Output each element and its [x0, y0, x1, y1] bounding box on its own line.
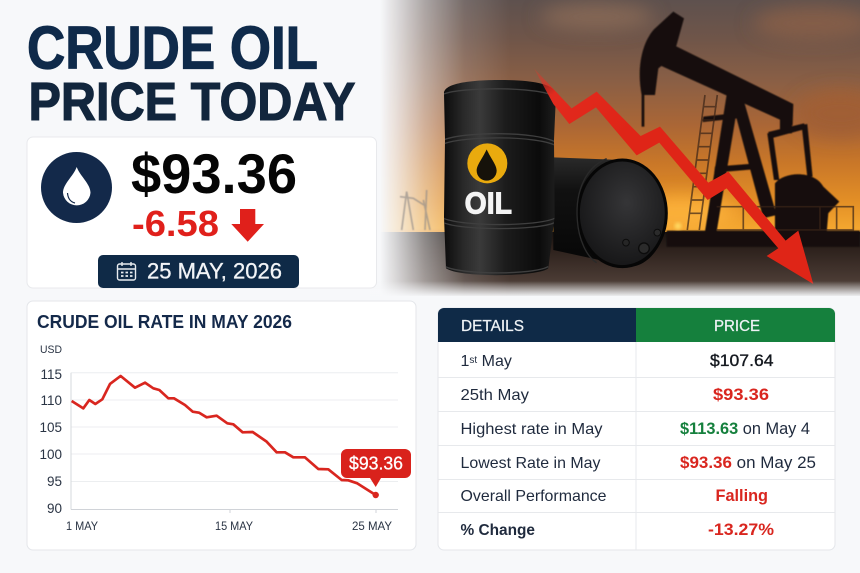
price callout: [341, 449, 411, 487]
x axis labels: 1 MAY: [66, 519, 98, 533]
oil logo drop: [477, 149, 497, 181]
row labels: May: [477, 353, 512, 370]
row labels: Lowest Rate in May: [460, 455, 600, 472]
distant pump jacks: [400, 190, 430, 230]
pump jack silhouette: [640, 12, 860, 247]
y axis labels: 90: [47, 501, 62, 516]
end point: [372, 492, 379, 498]
lying barrel bungs: [639, 243, 649, 254]
row labels: [460, 353, 607, 539]
row values: $107.64: [710, 352, 774, 370]
row labels: % Change: [460, 522, 535, 539]
table card: [438, 308, 835, 550]
row values: $93.36: [713, 386, 769, 404]
oil logo circle: [467, 143, 507, 183]
falling red arrow: [534, 68, 813, 284]
row values: $93.36 on May 25: [680, 454, 816, 472]
ladder and fence: [687, 95, 853, 230]
lying barrel end cap: [578, 160, 666, 267]
y axis unit: USD: [40, 344, 62, 356]
icon: down arrow: [231, 209, 264, 242]
lying barrel: [553, 157, 667, 267]
y axis labels: 115: [40, 367, 62, 382]
x axis labels: 25 MAY: [352, 519, 392, 533]
row values: Falling: [716, 487, 768, 505]
title: [27, 14, 356, 132]
price value: $93.36: [131, 142, 297, 205]
y axis labels: 110: [40, 393, 62, 408]
icon: calendar: [118, 262, 136, 280]
lying barrel hoop: [577, 159, 607, 263]
standing barrel body: [444, 80, 556, 275]
row labels: st: [469, 355, 477, 366]
sky clouds: [540, 3, 860, 230]
x axis labels: 15 MAY: [215, 519, 253, 533]
row labels: 25th May: [460, 387, 529, 404]
price callout: $93.36: [349, 454, 403, 474]
chart heading: CRUDE OIL RATE IN MAY 2026: [37, 312, 292, 332]
date text: 25 MAY, 2026: [147, 258, 282, 284]
price change: -6.58: [132, 203, 219, 244]
header labels: DETAILS: [461, 318, 524, 335]
y axis labels: 95: [47, 474, 62, 489]
ground: [370, 232, 860, 296]
hero backdrop faded to the left: [370, 0, 860, 296]
OIL label: OIL: [465, 186, 512, 220]
title line 1: CRUDE OIL: [27, 14, 318, 82]
table header: details: [438, 308, 636, 342]
x axis labels: [66, 519, 392, 533]
date badge: [98, 255, 299, 288]
price line: [72, 376, 376, 495]
row labels: Overall Performance: [460, 488, 607, 505]
sun: [674, 222, 682, 230]
y axis labels: 105: [39, 420, 62, 435]
row values: [680, 352, 816, 539]
row values: -13.27%: [708, 521, 774, 539]
table header: price: [636, 308, 835, 342]
hero photo: barrels, pump jack and falling arrow: [370, 0, 860, 297]
bottom white fade: [370, 281, 860, 297]
row labels: Highest rate in May: [460, 421, 602, 438]
price card: [27, 137, 376, 288]
panel: line chart: [27, 301, 416, 550]
standing barrel with oil logo: [443, 80, 557, 275]
y axis labels: 100: [39, 447, 62, 462]
header labels: [461, 318, 760, 335]
sunset sky: [370, 0, 860, 240]
icon: oil drop: [41, 152, 112, 223]
grid lines: [71, 373, 398, 513]
header labels: PRICE: [714, 318, 760, 335]
lying barrel body: [553, 157, 667, 267]
panel: current price: [27, 137, 376, 288]
row values: $113.63 on May 4: [680, 420, 810, 438]
barrel rim and hoops: [443, 89, 557, 273]
row labels: 1: [460, 353, 469, 370]
row dividers: [438, 342, 835, 550]
y axis labels: [39, 367, 62, 516]
title line 2: PRICE TODAY: [28, 72, 356, 132]
chart card: [27, 301, 416, 550]
panel: price details table: [438, 308, 835, 550]
